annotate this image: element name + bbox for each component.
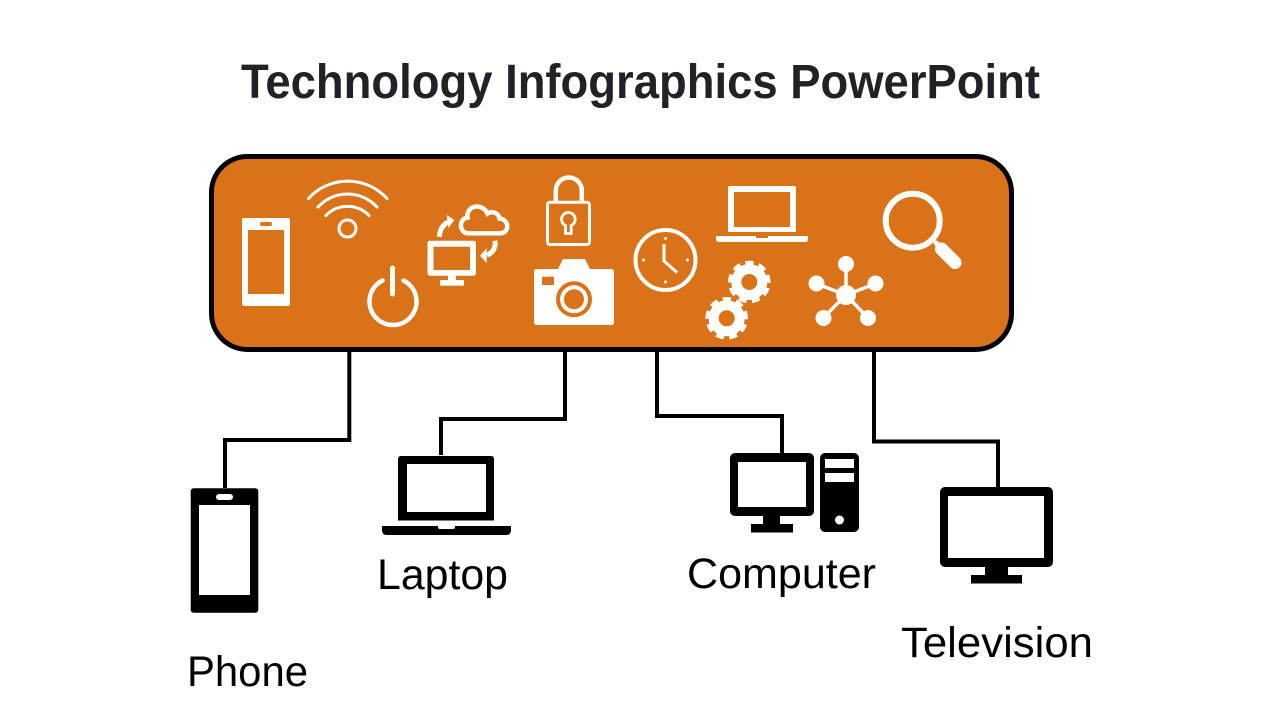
icon: laptop: [716, 186, 808, 242]
label: Computer: Computer: [687, 550, 876, 598]
icon: gears: [703, 258, 773, 342]
panel: technology icons: [212, 156, 1012, 350]
icon: camera: [534, 259, 614, 325]
device: laptop: [382, 456, 511, 535]
connector: laptop: [441, 350, 565, 455]
icon: network: [808, 256, 884, 326]
icon: power: [369, 268, 416, 325]
device: television: [940, 487, 1053, 584]
label: Phone: Phone: [187, 648, 308, 696]
title: Technology Infographics PowerPoint: [241, 56, 1040, 109]
device: desktop computer: [730, 453, 859, 532]
connector: phone: [225, 350, 349, 488]
icon: wifi: [308, 181, 387, 237]
label: Television: Television: [901, 619, 1093, 667]
icon: smartphone: [242, 218, 290, 306]
connector: television: [874, 350, 998, 488]
icon: clock: [636, 230, 696, 290]
icon: padlock: [548, 178, 590, 244]
connector: computer: [657, 350, 782, 454]
icon: cloud sync: [428, 207, 507, 286]
device: phone: [191, 488, 258, 613]
icon: magnifier: [886, 194, 955, 262]
label: Laptop: Laptop: [377, 551, 508, 599]
